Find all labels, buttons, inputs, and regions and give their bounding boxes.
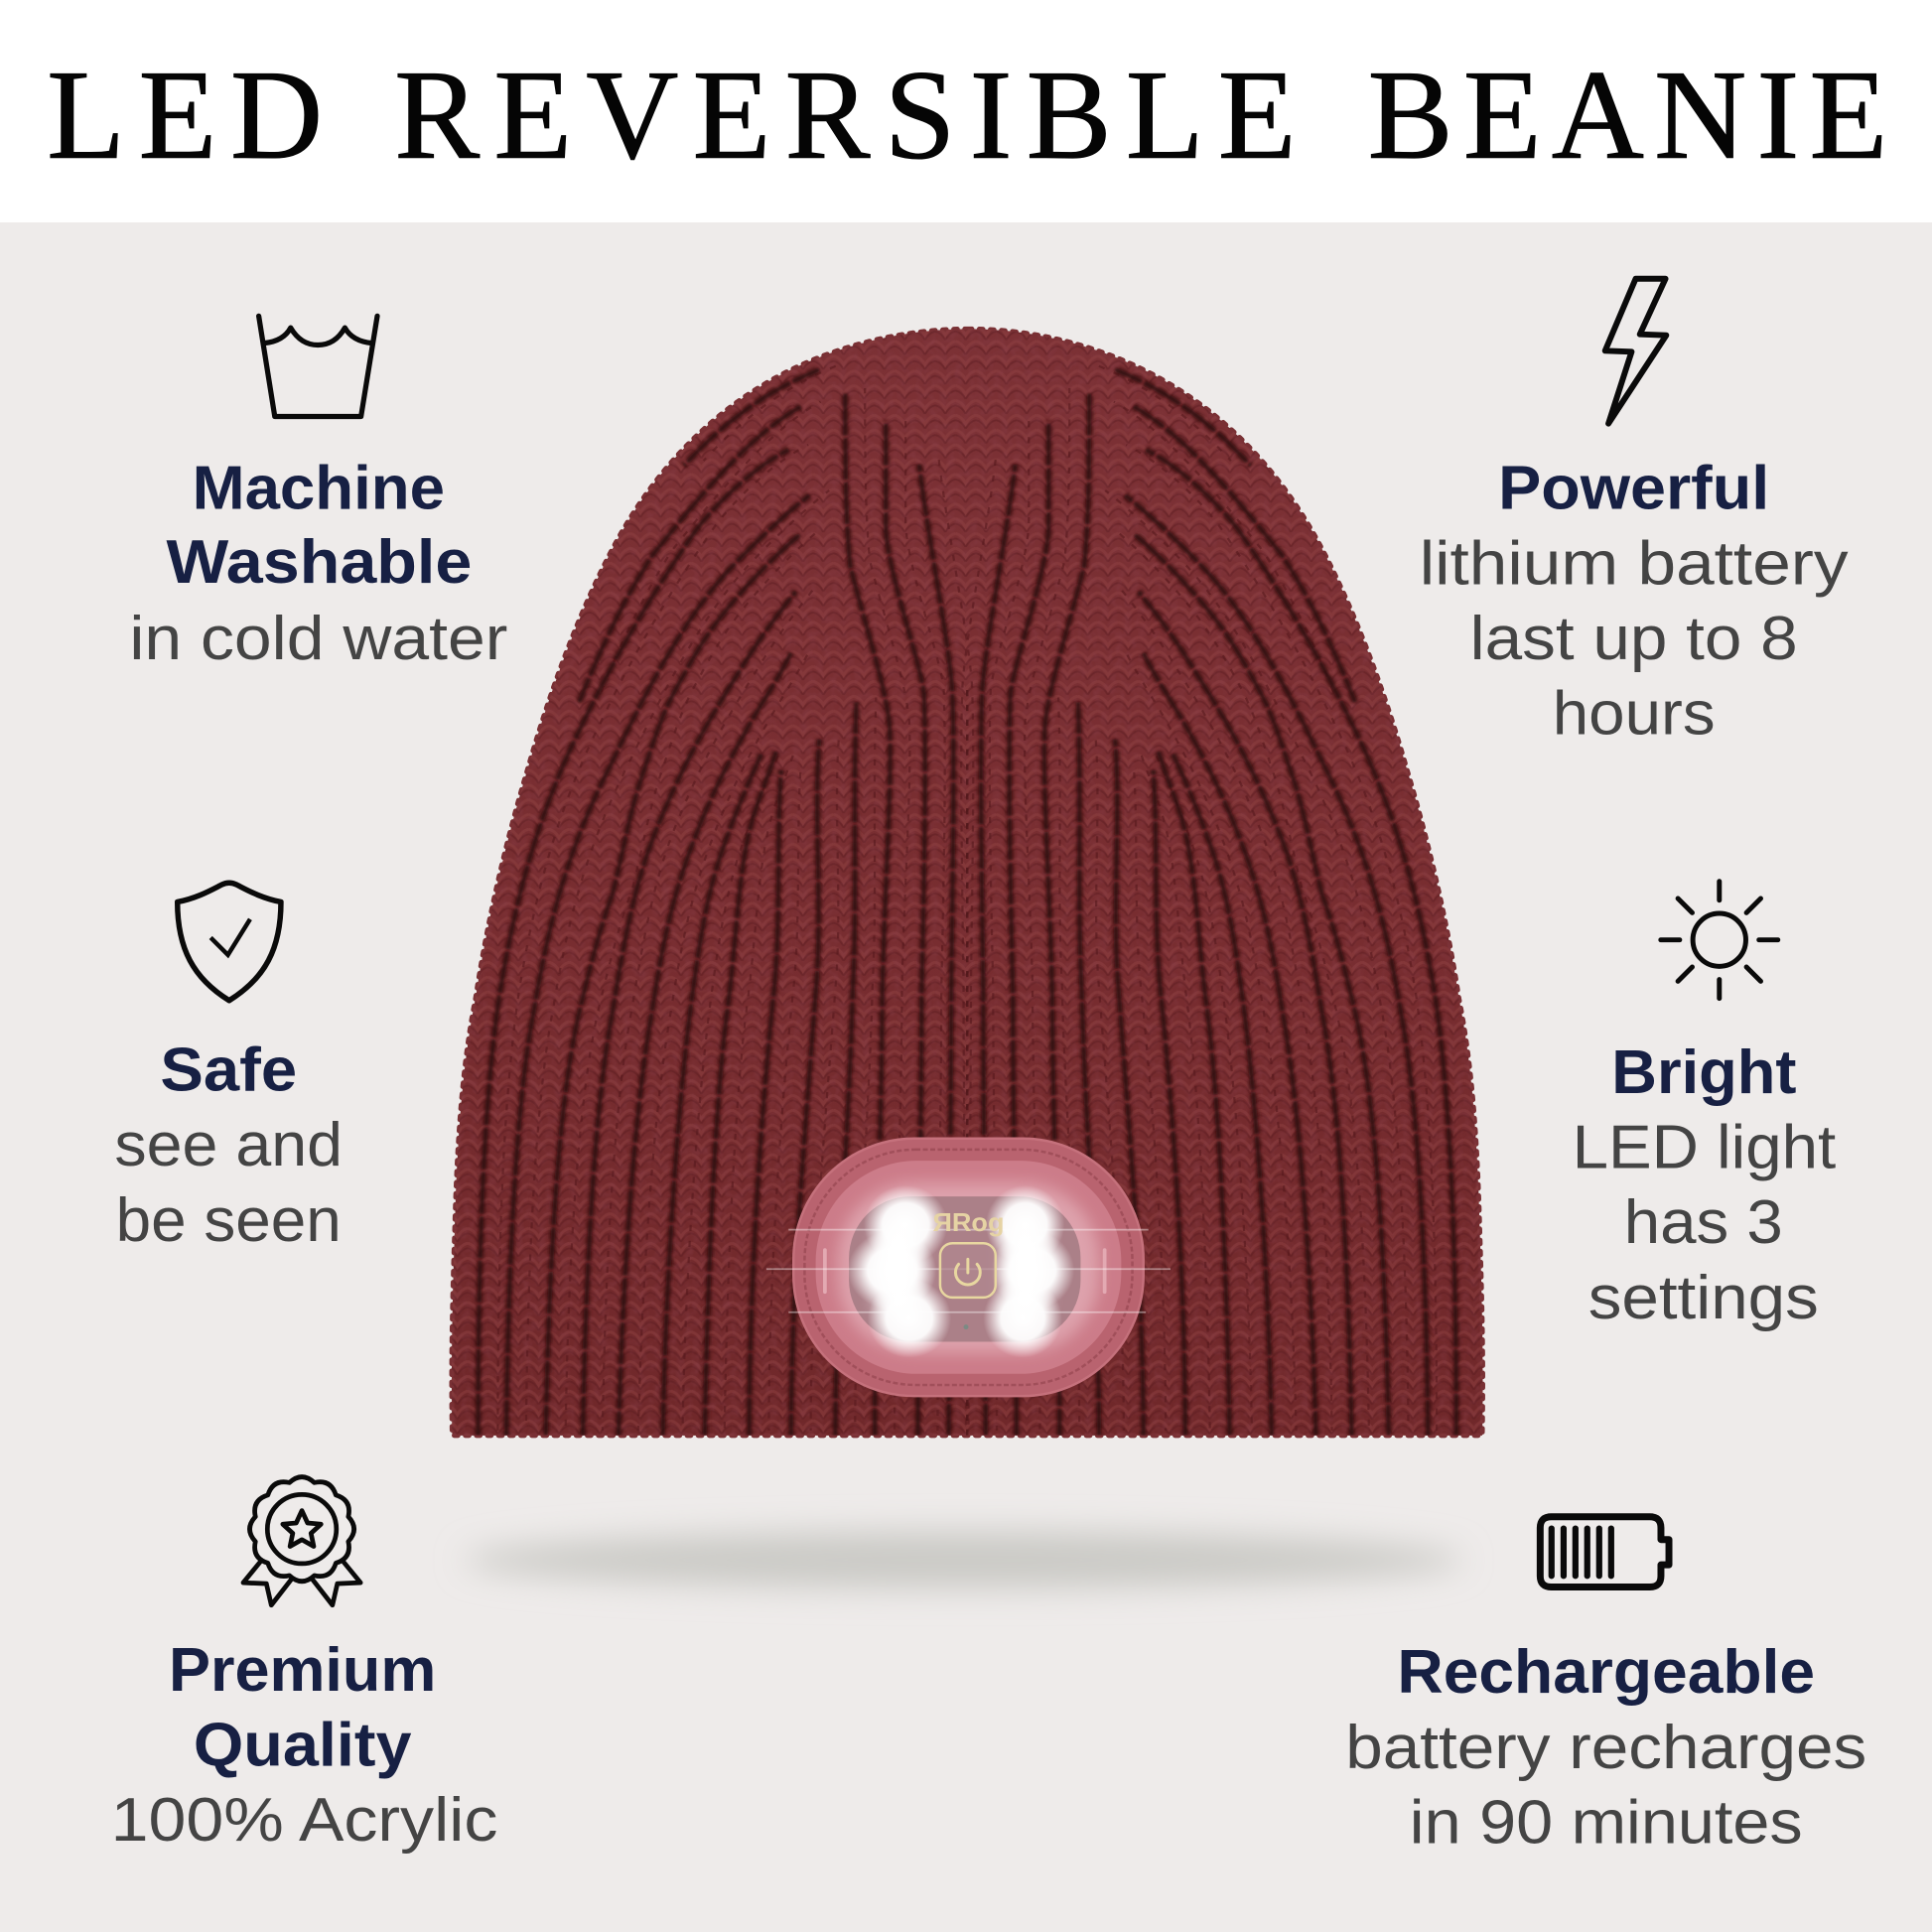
brand logo: ЯRog (932, 1207, 1004, 1237)
icon: award badge (243, 1477, 360, 1605)
title (47, 44, 1887, 186)
text: premium quality (111, 1636, 497, 1855)
light streaks (766, 1230, 1171, 1312)
feature: safe (114, 883, 343, 1255)
indicator dot (964, 1324, 968, 1329)
LED light module (766, 1139, 1171, 1396)
title: REVERSIBLE (394, 44, 1297, 186)
text: machine washable: Machine (193, 455, 445, 523)
text: machine washable (129, 455, 507, 673)
icon: sun (1661, 882, 1778, 999)
knit ribs and texture (444, 321, 1491, 1442)
text: rechargeable: battery recharges (1345, 1714, 1866, 1782)
title band (0, 0, 1932, 222)
text: premium quality: 100% Acrylic (111, 1786, 497, 1855)
title: BEANIE (1368, 44, 1887, 186)
text: safe: see and (114, 1111, 343, 1179)
text: powerful: Powerful (1498, 455, 1769, 523)
text: rechargeable (1345, 1638, 1866, 1858)
text: safe (114, 1035, 343, 1255)
beanie body (452, 329, 1482, 1436)
text: bright: LED light (1573, 1114, 1836, 1182)
title: LED (47, 44, 323, 186)
text: premium quality: Quality (194, 1711, 412, 1779)
housing glow (838, 1182, 1099, 1353)
text: powerful: hours (1553, 680, 1716, 749)
feature: bright (1573, 882, 1836, 1332)
icon: wash basin (259, 316, 377, 416)
text: rechargeable: Rechargeable (1397, 1638, 1815, 1707)
icon: battery (1540, 1517, 1669, 1587)
feature: rechargeable (1345, 1517, 1866, 1858)
feature: powerful (1420, 279, 1849, 749)
text: powerful (1420, 455, 1849, 749)
text: machine washable: Washable (167, 528, 472, 597)
text: premium quality: Premium (169, 1636, 436, 1705)
side slots (823, 1248, 1106, 1294)
text: safe: Safe (160, 1035, 297, 1104)
icon: shield check (178, 883, 281, 1001)
text: safe: be seen (116, 1186, 342, 1255)
power button (940, 1243, 996, 1298)
text: bright (1573, 1038, 1836, 1332)
feature: premium quality (111, 1477, 497, 1855)
text: powerful: last up to 8 (1470, 605, 1798, 673)
recessed panel (849, 1196, 1080, 1342)
LED glow spots (848, 1185, 1074, 1358)
text: bright: has 3 (1624, 1188, 1783, 1257)
module housing (793, 1139, 1144, 1396)
floor shadow under beanie (465, 1532, 1462, 1588)
text: bright: Bright (1611, 1038, 1796, 1107)
feature: machine washable (129, 316, 507, 673)
text: rechargeable: in 90 minutes (1410, 1789, 1803, 1858)
text: powerful: lithium battery (1420, 529, 1849, 598)
beanie illustration (444, 321, 1491, 1442)
icon: lightning bolt (1605, 279, 1666, 424)
text: bright: settings (1588, 1264, 1819, 1332)
text: machine washable: in cold water (129, 605, 507, 673)
